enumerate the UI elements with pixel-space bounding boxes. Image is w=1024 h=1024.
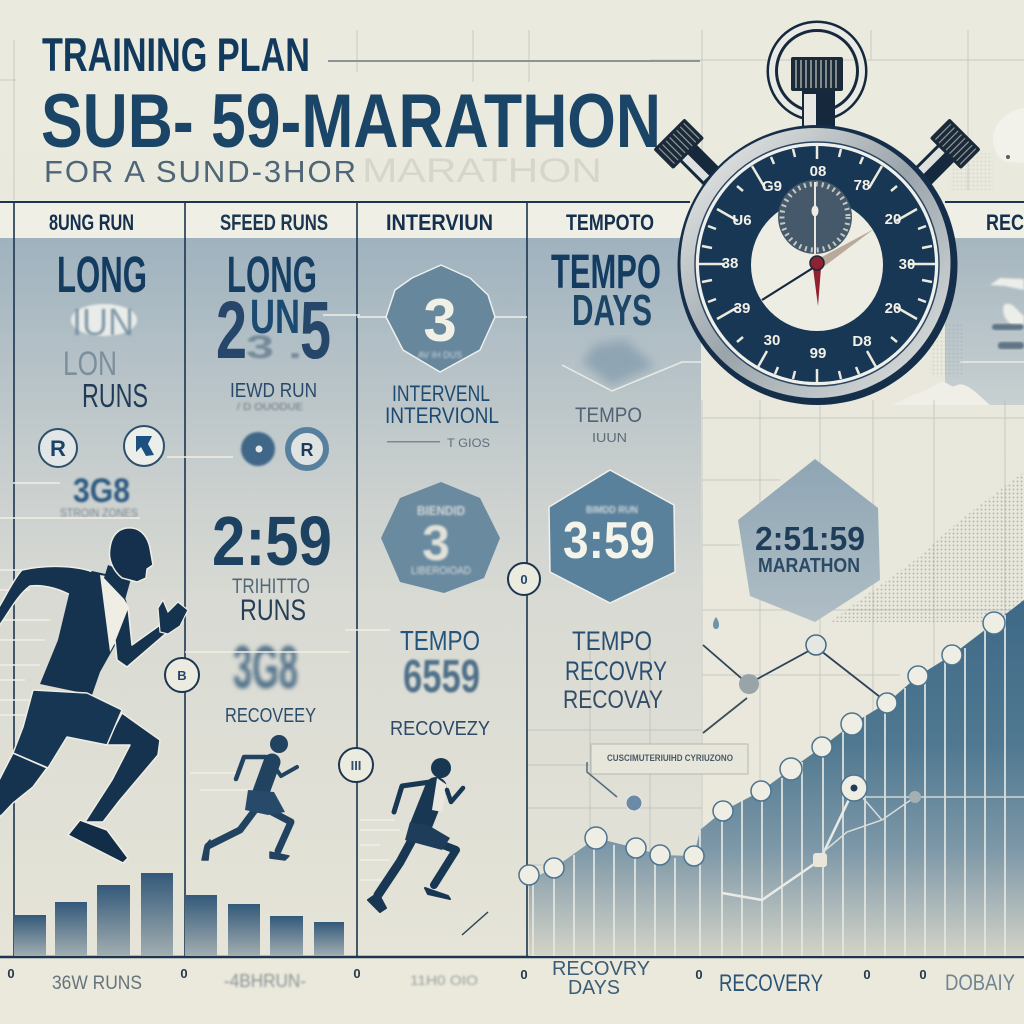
- dial numerals: 38: [722, 255, 738, 272]
- icon: stopwatch: [653, 22, 981, 405]
- dial: [699, 146, 935, 382]
- back leg: [208, 810, 255, 846]
- shelf line: [960, 361, 1024, 363]
- sweep hand: red: [813, 268, 821, 306]
- marker: column three node: III: [351, 758, 361, 773]
- chart stripes: [533, 615, 1024, 956]
- head: [431, 758, 451, 778]
- sub-dial: [778, 180, 852, 254]
- badge: marathon goal hexagon: [738, 459, 880, 622]
- neck: [104, 565, 132, 600]
- chart inner line: [722, 789, 854, 900]
- axis label: days: DAYS: [568, 977, 620, 999]
- badge: interval hexagon: 3: [423, 287, 457, 354]
- column header: tempo: TEMPOTO: [566, 210, 654, 235]
- panel: interval column: [381, 265, 500, 740]
- recovery scene: [893, 108, 1024, 405]
- front arm: [274, 766, 297, 776]
- shorts: [13, 690, 122, 768]
- badge: interval hexagon: AV IH DUS: [418, 350, 462, 360]
- shoe: [68, 820, 128, 863]
- runs label: RUNS: [82, 377, 148, 414]
- axis label: run: ‑4BHRUN‑: [224, 971, 306, 991]
- marker: column three node: [339, 748, 373, 782]
- blurred number: 6559: [403, 650, 480, 702]
- axis label: recovery: RECOVRY: [552, 958, 650, 980]
- blurred number: 3G8: [233, 634, 298, 701]
- dial numerals: G9: [762, 178, 782, 195]
- badge: 3 hexagon: 3: [422, 515, 450, 571]
- small caption: STROIN ZONES: [60, 506, 138, 520]
- dark blur: [992, 324, 1024, 330]
- square node: [813, 853, 827, 867]
- dial numerals: D8: [852, 333, 872, 350]
- badge: 3:59 hexagon: 3:59: [563, 512, 655, 570]
- front leg: [272, 812, 291, 851]
- callout: chart label: [587, 744, 748, 797]
- blurred digits: 3 .: [246, 329, 302, 365]
- chart branch line: [822, 797, 915, 853]
- speed lines: [0, 315, 527, 880]
- hand pivot: [810, 256, 824, 270]
- caption dash: [387, 441, 440, 442]
- marker: column four node: 0: [520, 572, 528, 587]
- runs label: RUNS: [240, 594, 306, 627]
- marker: column four node: [508, 563, 540, 595]
- sub-dial hand pivot: [812, 206, 818, 216]
- heading rule: [328, 60, 700, 62]
- bezel inner line: [695, 142, 939, 386]
- icon: left badge: [241, 432, 275, 466]
- dial numerals: 30: [899, 256, 915, 273]
- icon: right runner: [368, 758, 463, 912]
- axis ticks: 0: [863, 967, 871, 982]
- shoes: [368, 888, 450, 912]
- marker: column two node: B: [177, 668, 187, 683]
- shorts: [405, 822, 450, 850]
- torso: [420, 788, 436, 828]
- tempo label: TEMPO: [400, 625, 480, 656]
- panel: grey recovery band: [945, 238, 1024, 405]
- axis ticks: 0: [919, 967, 927, 982]
- chart spur line: [863, 798, 882, 820]
- subtitle: faded word: MARATHON: [362, 152, 602, 190]
- dial numerals: [722, 163, 915, 362]
- icon: right badge: [124, 426, 164, 466]
- chart lower line: [703, 698, 747, 733]
- panel: speed runs column: [212, 246, 332, 727]
- axis label: faded: 11H0 OIO: [410, 972, 478, 988]
- tempo label: TEMPO: [572, 626, 652, 656]
- dial numerals: 39: [734, 300, 750, 317]
- chevron shadow: [582, 340, 655, 386]
- large digit five: 5: [300, 285, 331, 376]
- axis ticks: 0: [695, 967, 703, 982]
- back leg: [378, 840, 412, 895]
- column header: long run: 8UNG RUN: [49, 210, 134, 235]
- long heading: LONG: [57, 246, 147, 303]
- title: sub-59-marathon: SUB- 59-MARATHON: [41, 79, 661, 164]
- shorts: [245, 790, 285, 815]
- run label: IEWD RUN: [230, 380, 317, 402]
- tick marks: [699, 146, 935, 382]
- back leg: [0, 753, 47, 817]
- dial numerals: 08: [810, 163, 826, 180]
- subtitle: for a sub-3 hour: FOR A SUND-3HOR: [44, 154, 356, 189]
- tempo label: TRIHITTO: [232, 575, 310, 598]
- singlet highlight: [100, 575, 128, 652]
- chart area: [529, 600, 1024, 956]
- node: blue sphere: [626, 795, 642, 811]
- steel bezel: [680, 128, 950, 398]
- head: [270, 735, 288, 753]
- dial numerals: 20: [885, 300, 901, 317]
- runs overlay: UN: [250, 291, 300, 344]
- node: grey end dot: [909, 791, 921, 803]
- white blob lower: [1003, 304, 1024, 330]
- node: grey sphere: [739, 674, 759, 694]
- recovery label: RECOVEEY: [225, 705, 316, 727]
- white dome: [993, 108, 1024, 163]
- dial numerals: 78: [854, 177, 870, 194]
- top ring outer: [768, 22, 866, 120]
- illustration: dotted mountain: [830, 472, 1024, 622]
- node centre: [850, 784, 858, 792]
- stem: [802, 91, 835, 127]
- axis label: runs: 36W RUNS: [52, 973, 142, 994]
- hand: [158, 600, 188, 634]
- heading: training plan: TRAINING PLAN: [42, 28, 310, 81]
- panel: tempo column: [549, 246, 702, 714]
- icon: middle runner: [202, 735, 297, 860]
- badge: 3:59 hexagon: [549, 470, 675, 603]
- dotted halo upper: [950, 153, 993, 190]
- faded long label: LON: [63, 345, 117, 383]
- table rules: [0, 202, 1024, 958]
- small caption: T GIOS: [447, 436, 490, 450]
- back arm: [236, 757, 266, 779]
- time: 2:59: 2:59: [212, 502, 332, 580]
- chart nodes: [519, 612, 1005, 885]
- front leg: [85, 713, 160, 822]
- axis ticks: 0: [180, 966, 188, 981]
- large digit two: 2: [216, 285, 247, 376]
- axis ticks: 0: [7, 966, 15, 981]
- inner white face: [751, 199, 883, 331]
- long heading: LONG: [227, 246, 317, 303]
- icon: large runner: [0, 528, 188, 863]
- dial numerals: U6: [732, 212, 752, 229]
- recovery label: RECOVEZY: [390, 718, 490, 740]
- icon: right badge: [288, 430, 326, 468]
- sweep hand: black: [762, 266, 816, 300]
- back arm: [394, 782, 430, 812]
- panel: grey column band: [0, 238, 701, 958]
- badge: 3 hexagon: LIBEROIOAD: [411, 565, 471, 577]
- small caption: / D OUODUE: [237, 402, 303, 413]
- icon: right badge: R: [300, 440, 314, 460]
- interval label two: INTERVIONL: [385, 403, 499, 428]
- axis ticks: [7, 966, 927, 982]
- front arm: [115, 607, 170, 667]
- front leg: [425, 838, 456, 885]
- badge: 3 hexagon: [381, 482, 500, 593]
- singlet: [432, 778, 447, 812]
- chart: rising area with nodes: [519, 600, 1024, 956]
- badge: interval hexagon: [386, 265, 495, 372]
- motion stroke: [462, 912, 488, 935]
- shoes: [202, 840, 289, 860]
- head: [110, 528, 153, 582]
- tempo small label: TEMPO: [575, 404, 642, 427]
- icon: left badge: R: [50, 436, 66, 461]
- sweep hand: tan: [820, 229, 874, 268]
- interval label one: INTERVENL: [392, 381, 490, 406]
- badge: 3:59 hexagon: BIMDD RUN: [586, 505, 638, 516]
- ring inner edge: [776, 30, 858, 112]
- front arm: [447, 788, 463, 802]
- dome dot: [1006, 155, 1010, 159]
- blurred number: 3G8: [73, 472, 130, 510]
- marker: column two node: [165, 658, 199, 692]
- node: drop: [713, 617, 719, 629]
- column header: interval: INTERVIUN: [386, 210, 493, 235]
- goal label: MARATHON: [758, 555, 860, 577]
- axis labels: [7, 958, 1015, 999]
- left button: [653, 118, 737, 202]
- badge: 3 hexagon: BIENDID: [417, 503, 465, 518]
- run small label: IUUN: [592, 430, 627, 445]
- torso: [40, 571, 128, 695]
- crown: [791, 57, 843, 91]
- dial numerals: 20: [885, 211, 901, 228]
- torso: [260, 762, 272, 795]
- callout: chart label: CUSCIMUTERIUIHD CYRIUZONO: [607, 753, 733, 763]
- bar chart: [14, 873, 344, 956]
- back arm: [0, 566, 95, 630]
- icon: left badge: [39, 429, 77, 467]
- chart top line: [703, 645, 880, 697]
- tempo heading: TEMPO: [551, 246, 661, 299]
- panel: header row: [0, 203, 1024, 238]
- blurred run label: IUN: [72, 302, 134, 344]
- dial numerals: 99: [810, 345, 826, 362]
- dotted halo lower: [930, 323, 963, 377]
- sub-dial hand: [814, 182, 816, 263]
- cloud: [893, 382, 990, 405]
- white blob behind run label: [71, 304, 137, 336]
- recovery label two: RECOVAY: [563, 686, 663, 714]
- axis label: recovery two: RECOVERY: [719, 970, 823, 997]
- ring highlight: [772, 26, 862, 116]
- column header: speed runs: SFEED RUNS: [220, 210, 328, 235]
- goal time: 2:51:59: [755, 520, 865, 557]
- axis ticks: 0: [353, 966, 361, 981]
- days heading: DAYS: [572, 286, 652, 335]
- axis ticks: 0: [520, 967, 528, 982]
- chevron edge: [562, 362, 702, 391]
- right button: [897, 118, 981, 202]
- panel: long run column: [39, 246, 164, 520]
- recovery label: RECOVRY: [565, 656, 667, 686]
- case: [678, 125, 958, 405]
- dark blur lower: [998, 342, 1024, 349]
- white blob: [990, 278, 1024, 290]
- dial numerals: 30: [764, 332, 780, 349]
